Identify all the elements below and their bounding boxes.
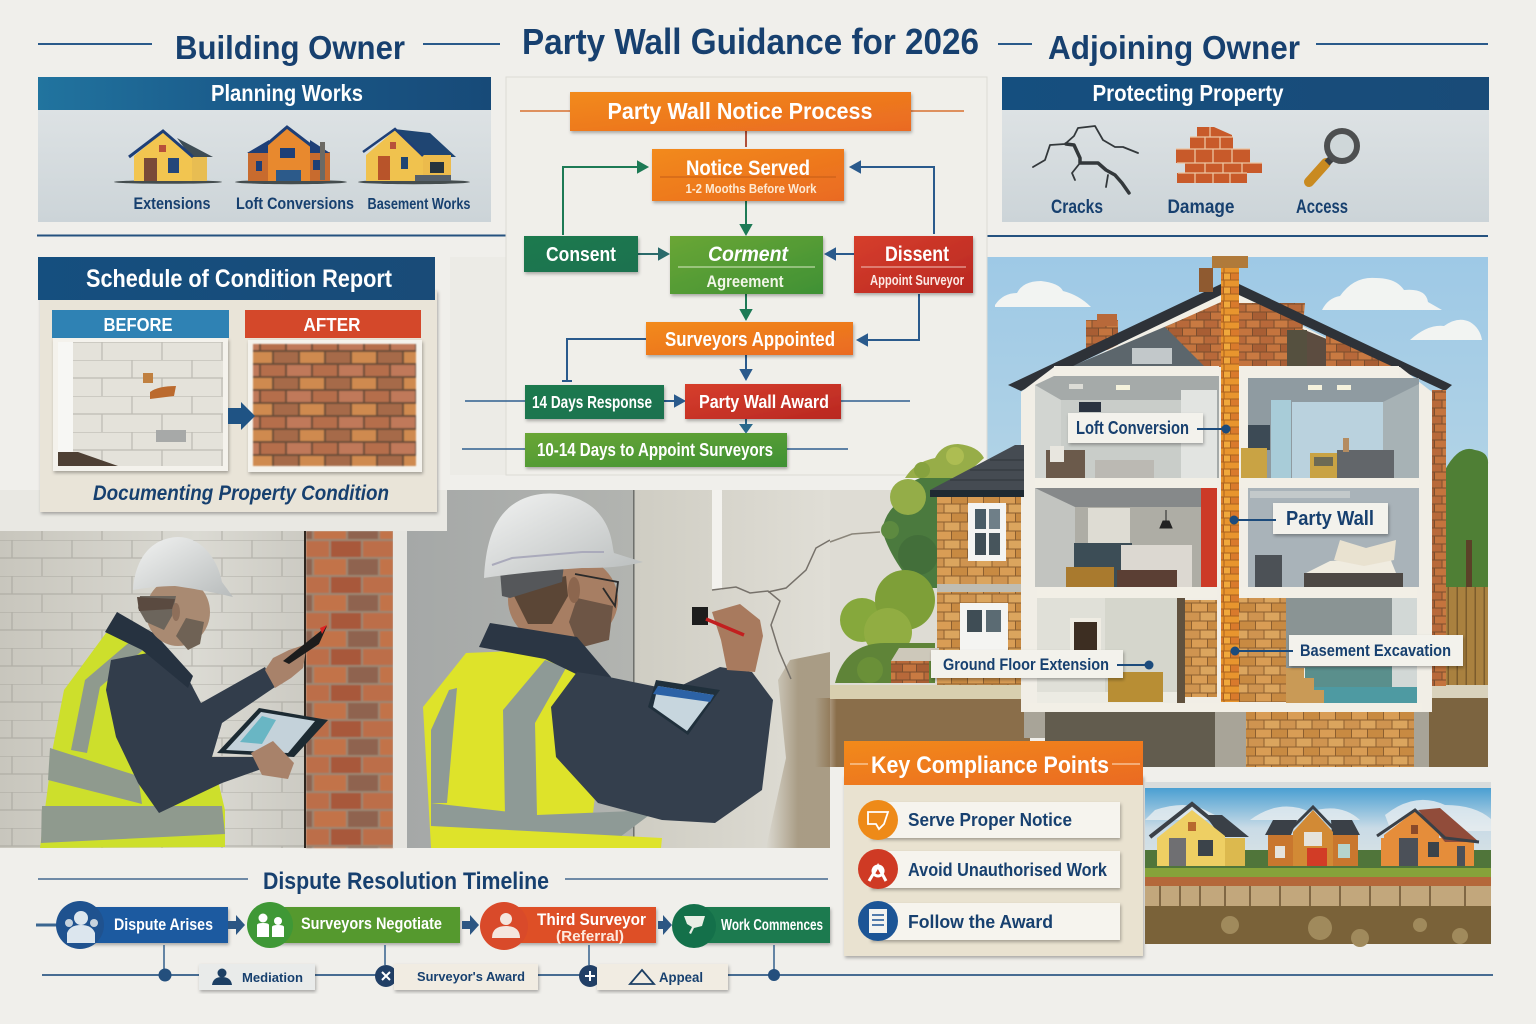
item: serve proper notice: Serve Proper Notice bbox=[908, 810, 1072, 830]
side extension bbox=[830, 497, 1027, 699]
step: party wall award: Party Wall Award bbox=[699, 392, 829, 412]
timeline: surveyors negotiate bbox=[247, 902, 460, 948]
item: avoid unauthorised work bbox=[858, 849, 1120, 889]
clouds bbox=[995, 278, 1482, 340]
step: 14 days response: 14 Days Response bbox=[532, 392, 652, 412]
arrow bbox=[658, 915, 672, 935]
timeline node with plus bbox=[579, 945, 601, 987]
worker reflective stripes bbox=[41, 640, 225, 843]
house walls bbox=[1021, 367, 1432, 712]
label: damage: Damage bbox=[1168, 197, 1234, 218]
step: consent: Consent bbox=[546, 244, 616, 266]
label: cracks: Cracks bbox=[1051, 197, 1103, 218]
panel: planning works bbox=[38, 77, 491, 222]
icon: basement house bbox=[358, 129, 470, 184]
worker vest bbox=[423, 650, 609, 847]
party wall chimney bbox=[1221, 262, 1239, 702]
timeline: surveyors negotiate: Surveyors Negotiate bbox=[301, 914, 442, 933]
heading: protecting property: Protecting Property bbox=[1092, 80, 1284, 106]
step: notice served: 1-2 Mooths Before Work bbox=[686, 181, 817, 196]
step: dissent: Dissent bbox=[885, 243, 949, 266]
label: loft conversions: Loft Conversions bbox=[236, 194, 354, 213]
floor slabs bbox=[1054, 366, 1219, 376]
timeline: third surveyor referral: Third Surveyor bbox=[537, 910, 646, 929]
caption: Documenting Property Condition bbox=[93, 482, 389, 505]
label: access: Access bbox=[1296, 197, 1348, 218]
gable bbox=[1023, 293, 1432, 392]
label: ground floor extension: Ground Floor Extension bbox=[943, 655, 1109, 674]
photo: surveyor inspecting cracked wall bbox=[407, 490, 830, 848]
step: corment agreement: Agreement bbox=[706, 272, 784, 291]
worker collar bbox=[105, 612, 193, 688]
photo: surveyor inspecting white wall and brick bbox=[0, 531, 393, 848]
icon: extension house bbox=[114, 131, 222, 184]
step: notice served bbox=[652, 149, 844, 201]
middle left room bbox=[1035, 488, 1217, 587]
label: basement excavation bbox=[1230, 635, 1463, 666]
label: basement works: Basement Works bbox=[368, 196, 471, 213]
label: appeal: Appeal bbox=[659, 969, 703, 985]
house three bbox=[1377, 808, 1479, 866]
middle right room bbox=[1248, 488, 1419, 587]
label: loft conversion: Loft Conversion bbox=[1076, 418, 1189, 438]
title: Party Wall Guidance for 2026: Party Wall Guidance for 2026 bbox=[522, 21, 979, 62]
heading: schedule of condition report: Schedule of Condition Report bbox=[86, 265, 393, 293]
step: consent bbox=[524, 236, 638, 272]
label: loft conversion bbox=[1068, 413, 1230, 443]
worker helmet bbox=[133, 537, 233, 597]
timeline node with cross bbox=[375, 945, 397, 987]
timeline node bbox=[158, 945, 172, 982]
tree top overlapping the process panel bbox=[905, 444, 984, 478]
label: extensions: Extensions bbox=[134, 194, 210, 213]
title: Building Owner: Building Owner bbox=[175, 29, 405, 66]
before card bbox=[52, 310, 229, 471]
item: serve proper notice bbox=[858, 800, 1120, 840]
illustration: three houses on foundations bbox=[1145, 782, 1491, 947]
left tree bbox=[881, 478, 986, 588]
label: mediation bbox=[199, 964, 315, 990]
ground bbox=[815, 698, 1030, 767]
step: dissent bbox=[854, 236, 973, 293]
panel: protecting property bbox=[1002, 77, 1489, 222]
arrow bbox=[228, 915, 245, 935]
label: appeal bbox=[597, 964, 728, 990]
timeline: third surveyor referral bbox=[480, 902, 656, 950]
worker stripes bbox=[431, 660, 656, 847]
label: surveyor's award: Surveyor's Award bbox=[417, 969, 525, 984]
top left room bbox=[1035, 376, 1219, 478]
icon: cracks bbox=[1033, 126, 1138, 193]
step: 10-14 days to appoint surveyors: 10-14 Days to Appoint Surveyors bbox=[537, 440, 773, 460]
step: 10-14 days to appoint surveyors bbox=[525, 433, 787, 467]
icon: loft conversion house bbox=[235, 127, 347, 184]
photo: house cross-section bbox=[815, 256, 1488, 767]
worker collar bbox=[479, 623, 611, 689]
step: dissent: Appoint Surveyor bbox=[870, 273, 964, 289]
extension roof bbox=[930, 445, 1024, 497]
heading: dispute resolution timeline: Dispute Resolution Timeline bbox=[263, 868, 549, 895]
label: party wall bbox=[1230, 503, 1388, 534]
worker jacket bbox=[106, 653, 275, 813]
house two bbox=[1265, 807, 1360, 866]
worker jacket bbox=[551, 667, 773, 823]
tablet bbox=[217, 708, 328, 757]
icon: damaged bricks bbox=[1176, 127, 1262, 183]
step: notice served: Notice Served bbox=[686, 157, 810, 180]
step: surveyors appointed bbox=[646, 322, 853, 355]
heading box: party wall notice process bbox=[570, 92, 911, 131]
label: party wall: Party Wall bbox=[1286, 508, 1374, 530]
roof bbox=[1008, 284, 1452, 391]
left bush bbox=[835, 570, 935, 683]
top right room bbox=[1241, 378, 1419, 478]
ground left room bbox=[1037, 598, 1217, 703]
hand holding pen bbox=[265, 644, 307, 688]
item: follow the award: Follow the Award bbox=[908, 912, 1053, 932]
timeline: third surveyor referral: (Referral) bbox=[556, 928, 624, 945]
basement room bbox=[1239, 598, 1417, 703]
step: party wall award bbox=[685, 384, 841, 419]
timeline: work commences bbox=[672, 904, 830, 948]
hand with measuring tool and pen bbox=[712, 604, 763, 672]
small chimney bbox=[1086, 320, 1118, 350]
item: avoid unauthorised work: Avoid Unauthorised Work bbox=[908, 860, 1108, 880]
timeline node bbox=[768, 945, 780, 981]
step: surveyors appointed: Surveyors Appointed bbox=[665, 329, 835, 351]
item: follow the award bbox=[858, 901, 1120, 941]
timeline: work commences: Work Commences bbox=[721, 917, 823, 934]
before card: BEFORE bbox=[104, 314, 172, 335]
house one bbox=[1150, 804, 1249, 866]
arrows: flow connectors bbox=[562, 131, 934, 432]
icon: magnifying glass bbox=[1309, 131, 1357, 182]
label: ground floor extension bbox=[931, 650, 1154, 678]
title: Adjoining Owner: Adjoining Owner bbox=[1048, 29, 1300, 66]
arrow bbox=[462, 915, 479, 935]
after card bbox=[245, 310, 422, 472]
timeline: dispute arises bbox=[36, 901, 228, 949]
heading: planning works: Planning Works bbox=[211, 80, 363, 106]
label: surveyor's award bbox=[394, 964, 538, 990]
panel: party wall notice process bbox=[450, 77, 987, 475]
right tree and fence bbox=[1445, 449, 1488, 587]
bottom timeline baseline bbox=[42, 974, 1493, 976]
panel: schedule of condition report bbox=[0, 257, 447, 531]
worker head bbox=[500, 553, 618, 648]
label: mediation: Mediation bbox=[242, 970, 303, 985]
timeline: dispute arises: Dispute Arises bbox=[114, 915, 213, 934]
arrow: before to after bbox=[228, 402, 255, 430]
worker helmet bbox=[484, 493, 643, 578]
tablet bbox=[648, 680, 720, 735]
step: 14 days response bbox=[525, 385, 664, 419]
heading box: party wall notice process: Party Wall Notice Process bbox=[608, 98, 872, 124]
step: corment agreement bbox=[670, 236, 823, 294]
after card: AFTER bbox=[304, 314, 360, 335]
heading: key compliance points: Key Compliance Points bbox=[871, 752, 1109, 779]
step: corment agreement: Corment bbox=[708, 243, 789, 266]
panel: key compliance points bbox=[844, 741, 1143, 956]
worker head bbox=[137, 578, 210, 650]
worker vest bbox=[40, 632, 225, 848]
label: basement excavation: Basement Excavation bbox=[1300, 641, 1451, 660]
